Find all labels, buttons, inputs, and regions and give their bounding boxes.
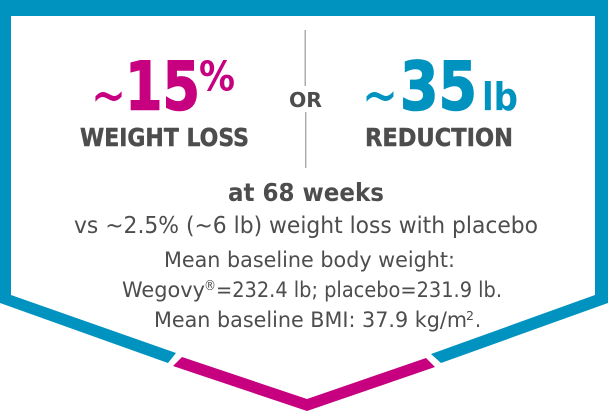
number 15: 15	[125, 48, 200, 126]
baseline text block: Mean baseline BMI: 37.9 kg/m	[154, 308, 467, 332]
number 35: 35	[400, 48, 477, 126]
tilde: ~	[362, 58, 398, 131]
stat: 35 lb reduction	[362, 48, 518, 152]
unit lb: lb	[482, 75, 518, 119]
frame: magenta chevron tip	[173, 357, 435, 411]
baseline text block: Mean baseline body weight:	[164, 248, 455, 272]
baseline text block: ®	[204, 278, 216, 294]
baseline text block	[122, 248, 502, 332]
OR label: OR	[289, 88, 322, 112]
baseline text block: .	[475, 308, 481, 332]
timepoint heading: at 68 weeks	[228, 178, 384, 207]
baseline text block: =232.4 lb; placebo=231.9 lb.	[216, 278, 502, 302]
percent sign: %	[199, 52, 235, 100]
label: weight loss: WEIGHT LOSS	[80, 123, 249, 152]
placebo comparison: vs ~2.5% (~6 lb) weight loss with placebo	[74, 213, 538, 239]
tilde: ~	[91, 58, 126, 131]
label: reduction: REDUCTION	[365, 123, 513, 152]
stat: 15% weight loss	[80, 48, 249, 152]
baseline text block: 2	[466, 308, 474, 323]
baseline text block: Wegovy	[122, 278, 205, 302]
divider with OR	[289, 30, 322, 168]
